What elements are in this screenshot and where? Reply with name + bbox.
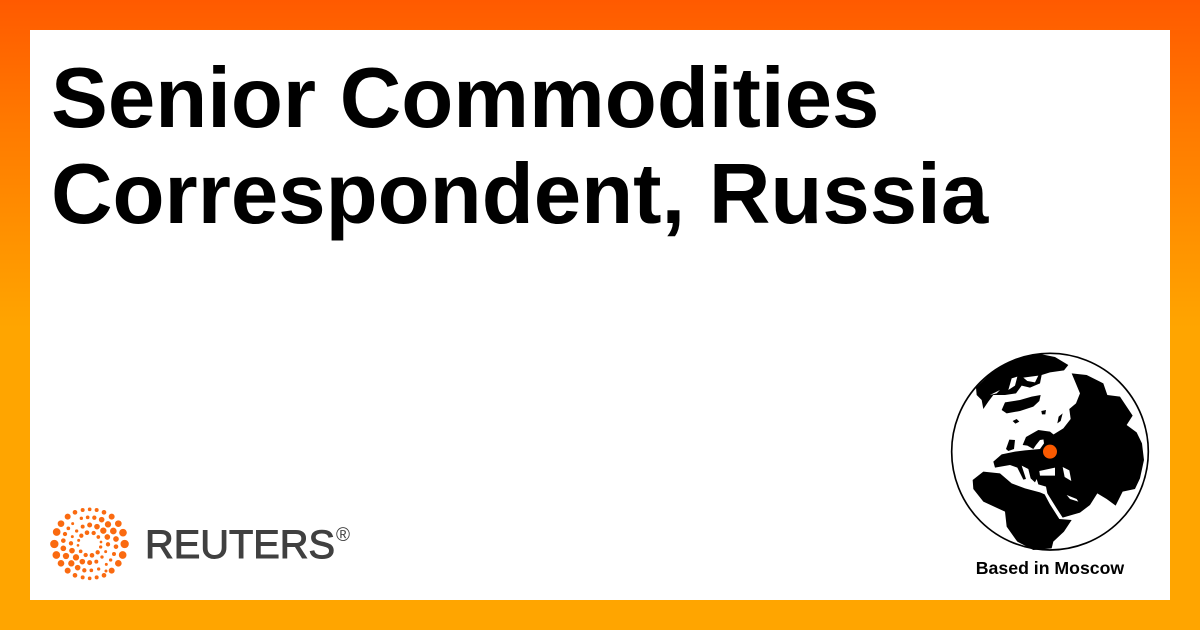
title: Correspondent, Russia: [51, 147, 988, 242]
registered mark: ®: [336, 525, 350, 546]
title: Senior Commodities: [51, 51, 879, 146]
Moscow marker: [1043, 445, 1057, 459]
North America and Arctic islands: [976, 354, 1068, 409]
Greenland: [1002, 395, 1041, 413]
Arctic island gaps: [990, 376, 1038, 395]
Eurasia: [993, 373, 1144, 518]
Black Sea: [1039, 468, 1055, 476]
caption: Based in Moscow: [976, 558, 1124, 578]
Caspian Sea: [1063, 467, 1071, 481]
icon: Reuters dot sphere: [51, 508, 128, 580]
Persian Gulf: [1067, 495, 1078, 502]
Scandinavia: [1023, 430, 1055, 449]
icon: globe centred on Moscow: [952, 353, 1148, 550]
Britain: [1006, 440, 1015, 451]
globe disc: [952, 353, 1148, 550]
icon: Reuters logo: [51, 508, 350, 580]
logo wordmark: REUTERS: [145, 523, 335, 567]
Africa: [973, 472, 1072, 550]
title: [51, 51, 989, 242]
Svalbard: [1041, 410, 1046, 414]
Novaya Zemlya: [1057, 413, 1063, 423]
Iceland: [1013, 419, 1019, 424]
